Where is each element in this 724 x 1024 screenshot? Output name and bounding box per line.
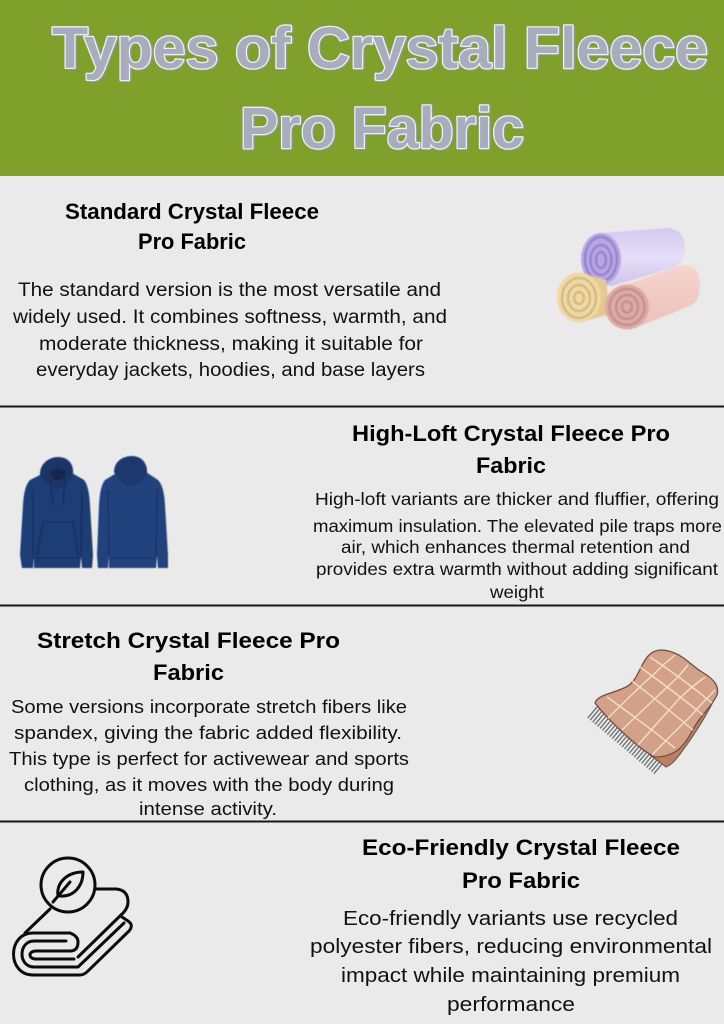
title: Types of Crystal Fleece bbox=[53, 16, 709, 82]
panel: eco-friendly bbox=[14, 835, 712, 1016]
title: Pro Fabric bbox=[240, 96, 524, 161]
header banner bbox=[0, 0, 724, 176]
heading: stretch: Stretch Crystal Fleece Pro bbox=[37, 628, 340, 653]
heading: standard: Standard Crystal Fleece bbox=[65, 199, 319, 224]
divider bbox=[0, 406, 724, 408]
text: standard description: everyday jackets, hoodies, and base layers bbox=[36, 360, 425, 381]
title: Pro Fabric bbox=[240, 96, 524, 161]
text: stretch description bbox=[9, 697, 409, 819]
heading: stretch bbox=[37, 628, 340, 685]
text: eco-friendly description: performance bbox=[447, 993, 575, 1016]
panel: standard bbox=[12, 199, 700, 381]
icon: eco towel with leaf bbox=[14, 858, 131, 975]
icon: plaid blanket bbox=[592, 650, 718, 769]
text: standard description: widely used. It combines softness, warmth, and bbox=[12, 307, 447, 328]
title bbox=[52, 16, 709, 162]
heading: eco-friendly: Pro Fabric bbox=[462, 868, 580, 893]
text: eco-friendly description bbox=[310, 907, 712, 1016]
text: high-loft description: maximum insulation. The elevated pile traps more bbox=[313, 516, 722, 536]
icon: navy hoodies bbox=[20, 456, 168, 568]
text: high-loft description: air, which enhances thermal retention and bbox=[341, 537, 690, 557]
heading: high-loft: Fabric bbox=[476, 453, 546, 478]
title: Types of Crystal Fleece bbox=[52, 16, 708, 81]
text: eco-friendly description: polyester fibers, reducing environmental bbox=[310, 935, 712, 958]
title: Types of Crystal Fleece bbox=[52, 16, 708, 81]
heading: standard bbox=[65, 199, 319, 254]
divider bbox=[0, 820, 724, 822]
text: standard description: The standard version is the most versatile and bbox=[18, 280, 441, 301]
text: stretch description: clothing, as it moves with the body during bbox=[24, 775, 394, 795]
heading: stretch: Fabric bbox=[153, 660, 224, 685]
title: Pro Fabric bbox=[241, 96, 525, 162]
panel: high-loft bbox=[20, 421, 722, 602]
text: standard description: moderate thickness, making it suitable for bbox=[39, 334, 424, 355]
text: high-loft description bbox=[313, 489, 722, 602]
icon: rolled towels bbox=[557, 228, 700, 330]
heading: eco-friendly bbox=[362, 835, 680, 893]
heading: eco-friendly: Eco-Friendly Crystal Fleece bbox=[362, 835, 680, 860]
text: high-loft description: provides extra warmth without adding significant bbox=[316, 559, 718, 579]
heading: standard: Pro Fabric bbox=[138, 229, 246, 254]
text: stretch description: intense activity. bbox=[139, 799, 277, 819]
heading: high-loft: High-Loft Crystal Fleece Pro bbox=[352, 421, 670, 446]
text: eco-friendly description: impact while maintaining premium bbox=[341, 964, 680, 987]
panel: stretch bbox=[9, 628, 718, 819]
text: stretch description: Some versions incorporate stretch fibers like bbox=[11, 697, 407, 717]
text: standard description bbox=[12, 280, 447, 381]
text: eco-friendly description: Eco-friendly variants use recycled bbox=[343, 907, 678, 930]
divider bbox=[0, 604, 724, 606]
heading: high-loft bbox=[352, 421, 670, 478]
text: high-loft description: High-loft variants are thicker and fluffier, offering bbox=[315, 489, 719, 509]
text: stretch description: spandex, giving the fabric added flexibility. bbox=[14, 723, 402, 743]
text: stretch description: This type is perfect for activewear and sports bbox=[9, 749, 409, 769]
text: high-loft description: weight bbox=[489, 582, 544, 602]
